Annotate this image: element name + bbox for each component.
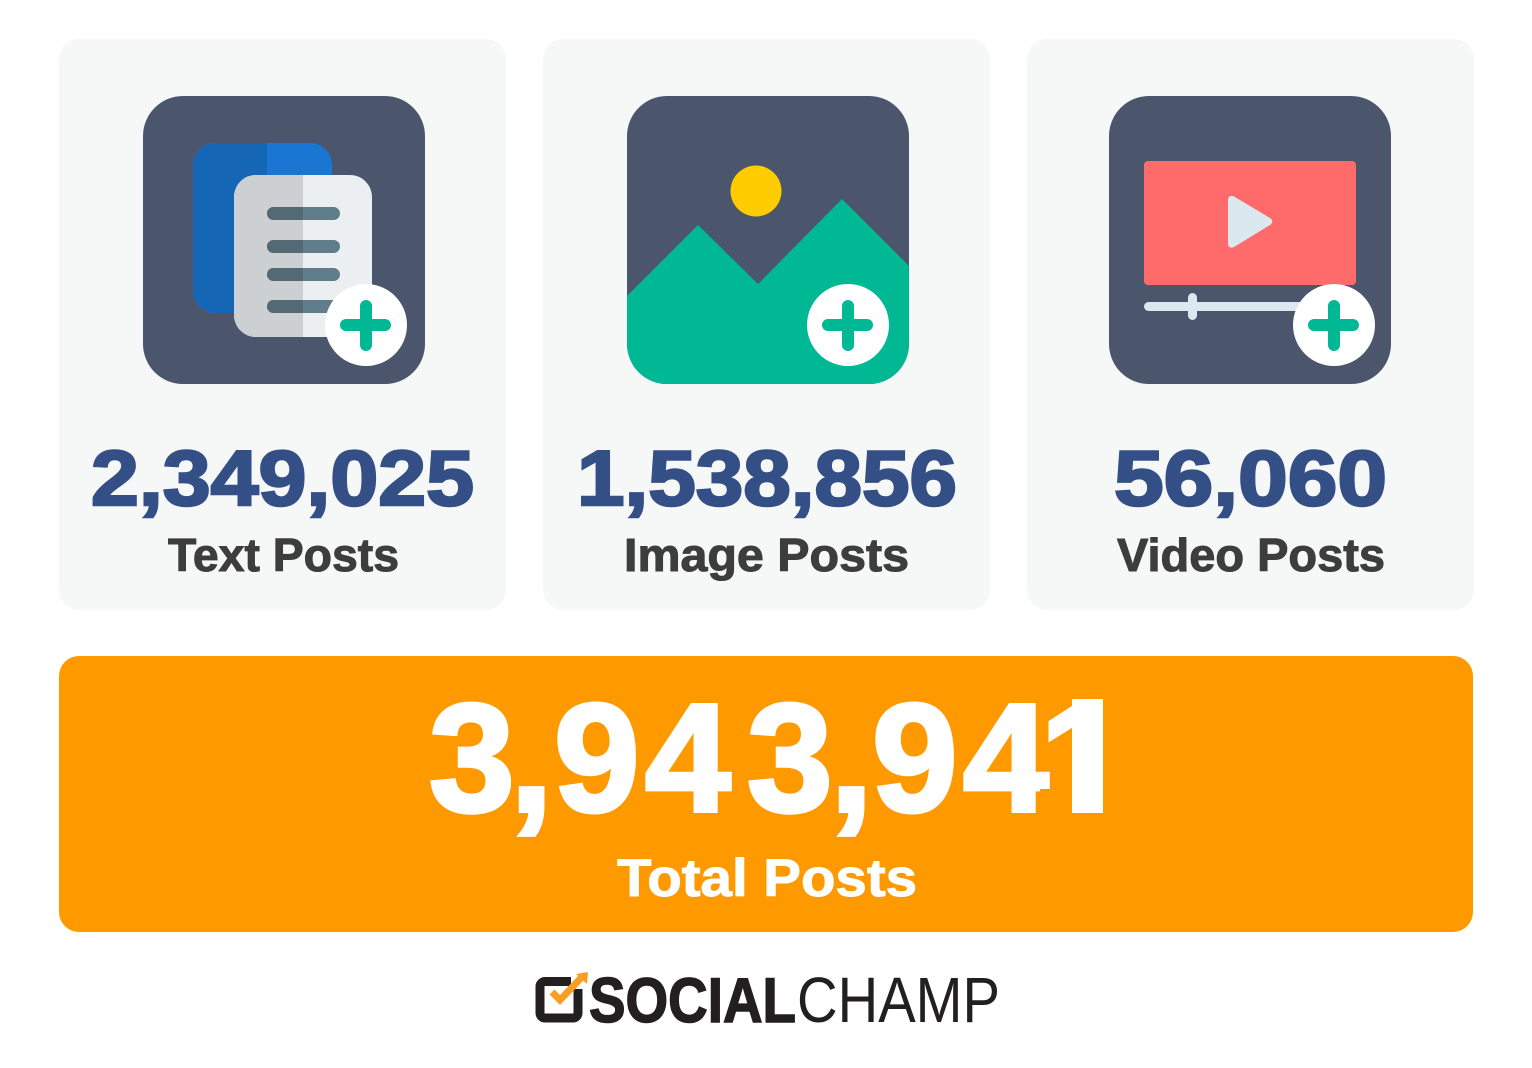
label: video posts: Video Posts — [1117, 529, 1385, 581]
number: video posts: 56,060 — [1114, 434, 1387, 522]
label: total posts: Total Posts — [617, 849, 917, 908]
wordmark: CHAMP: CHAMP — [797, 964, 1000, 1036]
icon: landscape image with plus — [627, 96, 909, 384]
label: image posts: Image Posts — [624, 529, 909, 581]
panel: video posts — [1027, 39, 1474, 610]
panel: text posts — [59, 39, 506, 610]
label: text posts: Text Posts — [168, 529, 399, 581]
icon: video player with plus — [1109, 96, 1391, 384]
wordmark: SOCIAL: SOCIAL — [589, 966, 796, 1036]
icon: logo checkbox — [540, 972, 588, 1018]
panel: total posts — [59, 656, 1473, 932]
logo: Social Champ — [540, 964, 1000, 1036]
icon: text documents with plus — [143, 96, 425, 384]
number: total posts: 3,943,941 — [429, 672, 1126, 844]
number: text posts: 2,349,025 — [91, 434, 474, 522]
panel: image posts — [543, 39, 990, 610]
number: image posts: 1,538,856 — [577, 434, 957, 522]
